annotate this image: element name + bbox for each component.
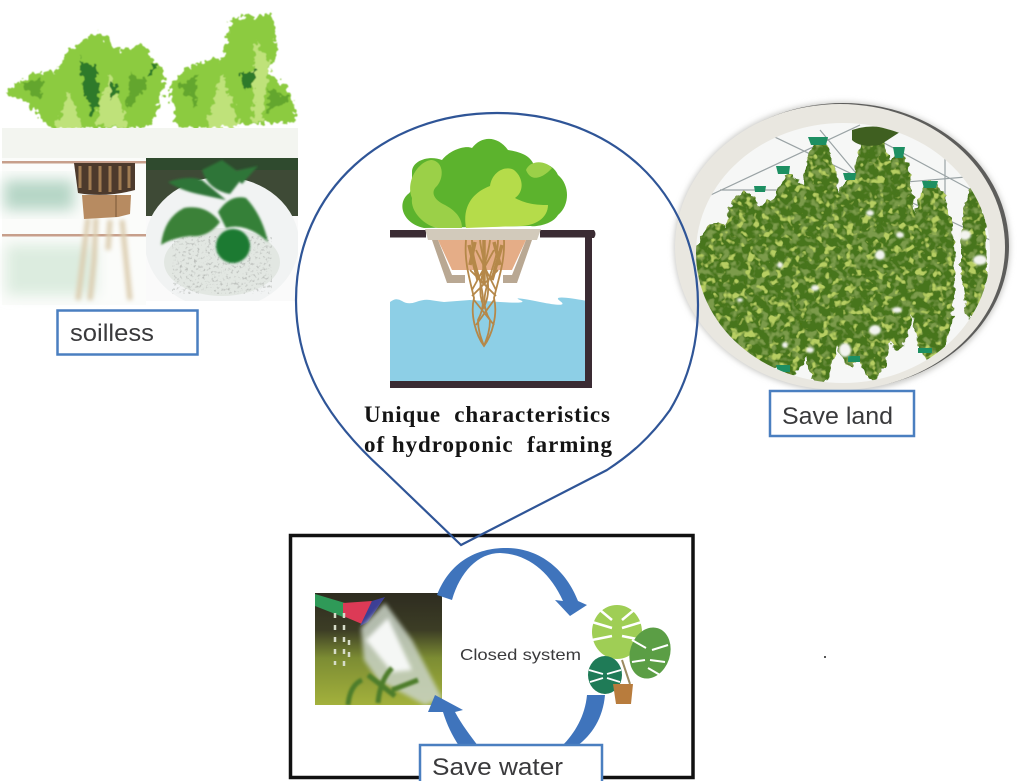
plant illustration	[588, 605, 677, 704]
arrow: lower right cycle band	[562, 695, 605, 746]
icon: hydroponic plant in water tank	[390, 139, 596, 388]
arrow: lower left cycle arrow	[428, 695, 478, 746]
label: save land: Save land	[782, 403, 893, 430]
panel: save water closed system frame	[290, 536, 693, 781]
ring frame	[674, 102, 1010, 392]
tower caps and white pots	[737, 126, 987, 372]
label: save water	[420, 745, 602, 781]
title: Unique characteristics	[364, 402, 610, 427]
lettuce head	[402, 139, 567, 228]
label: closed system: Closed system	[460, 647, 581, 664]
panel: save land circular photo of vertical towers	[674, 102, 1010, 392]
roots	[466, 240, 504, 346]
label: save land	[770, 391, 914, 436]
net pot	[425, 229, 541, 283]
net pot with roots photo	[2, 158, 146, 305]
title: of hydroponic farming	[364, 432, 612, 457]
label: soilless	[58, 310, 198, 354]
title	[364, 402, 612, 457]
greenhouse towers	[696, 123, 990, 383]
label: save water: Save water	[432, 754, 563, 781]
watering can photo	[315, 593, 442, 705]
panel: soilless photo collage	[2, 14, 299, 309]
arrow: top cycle arrow	[437, 548, 587, 616]
lettuce plants	[6, 14, 296, 128]
white channel	[2, 128, 298, 158]
label: soilless: soilless	[70, 320, 154, 347]
plant in white gravel photo	[145, 158, 299, 309]
teardrop outline	[296, 113, 698, 545]
tank frame	[390, 230, 596, 388]
water	[390, 298, 587, 382]
